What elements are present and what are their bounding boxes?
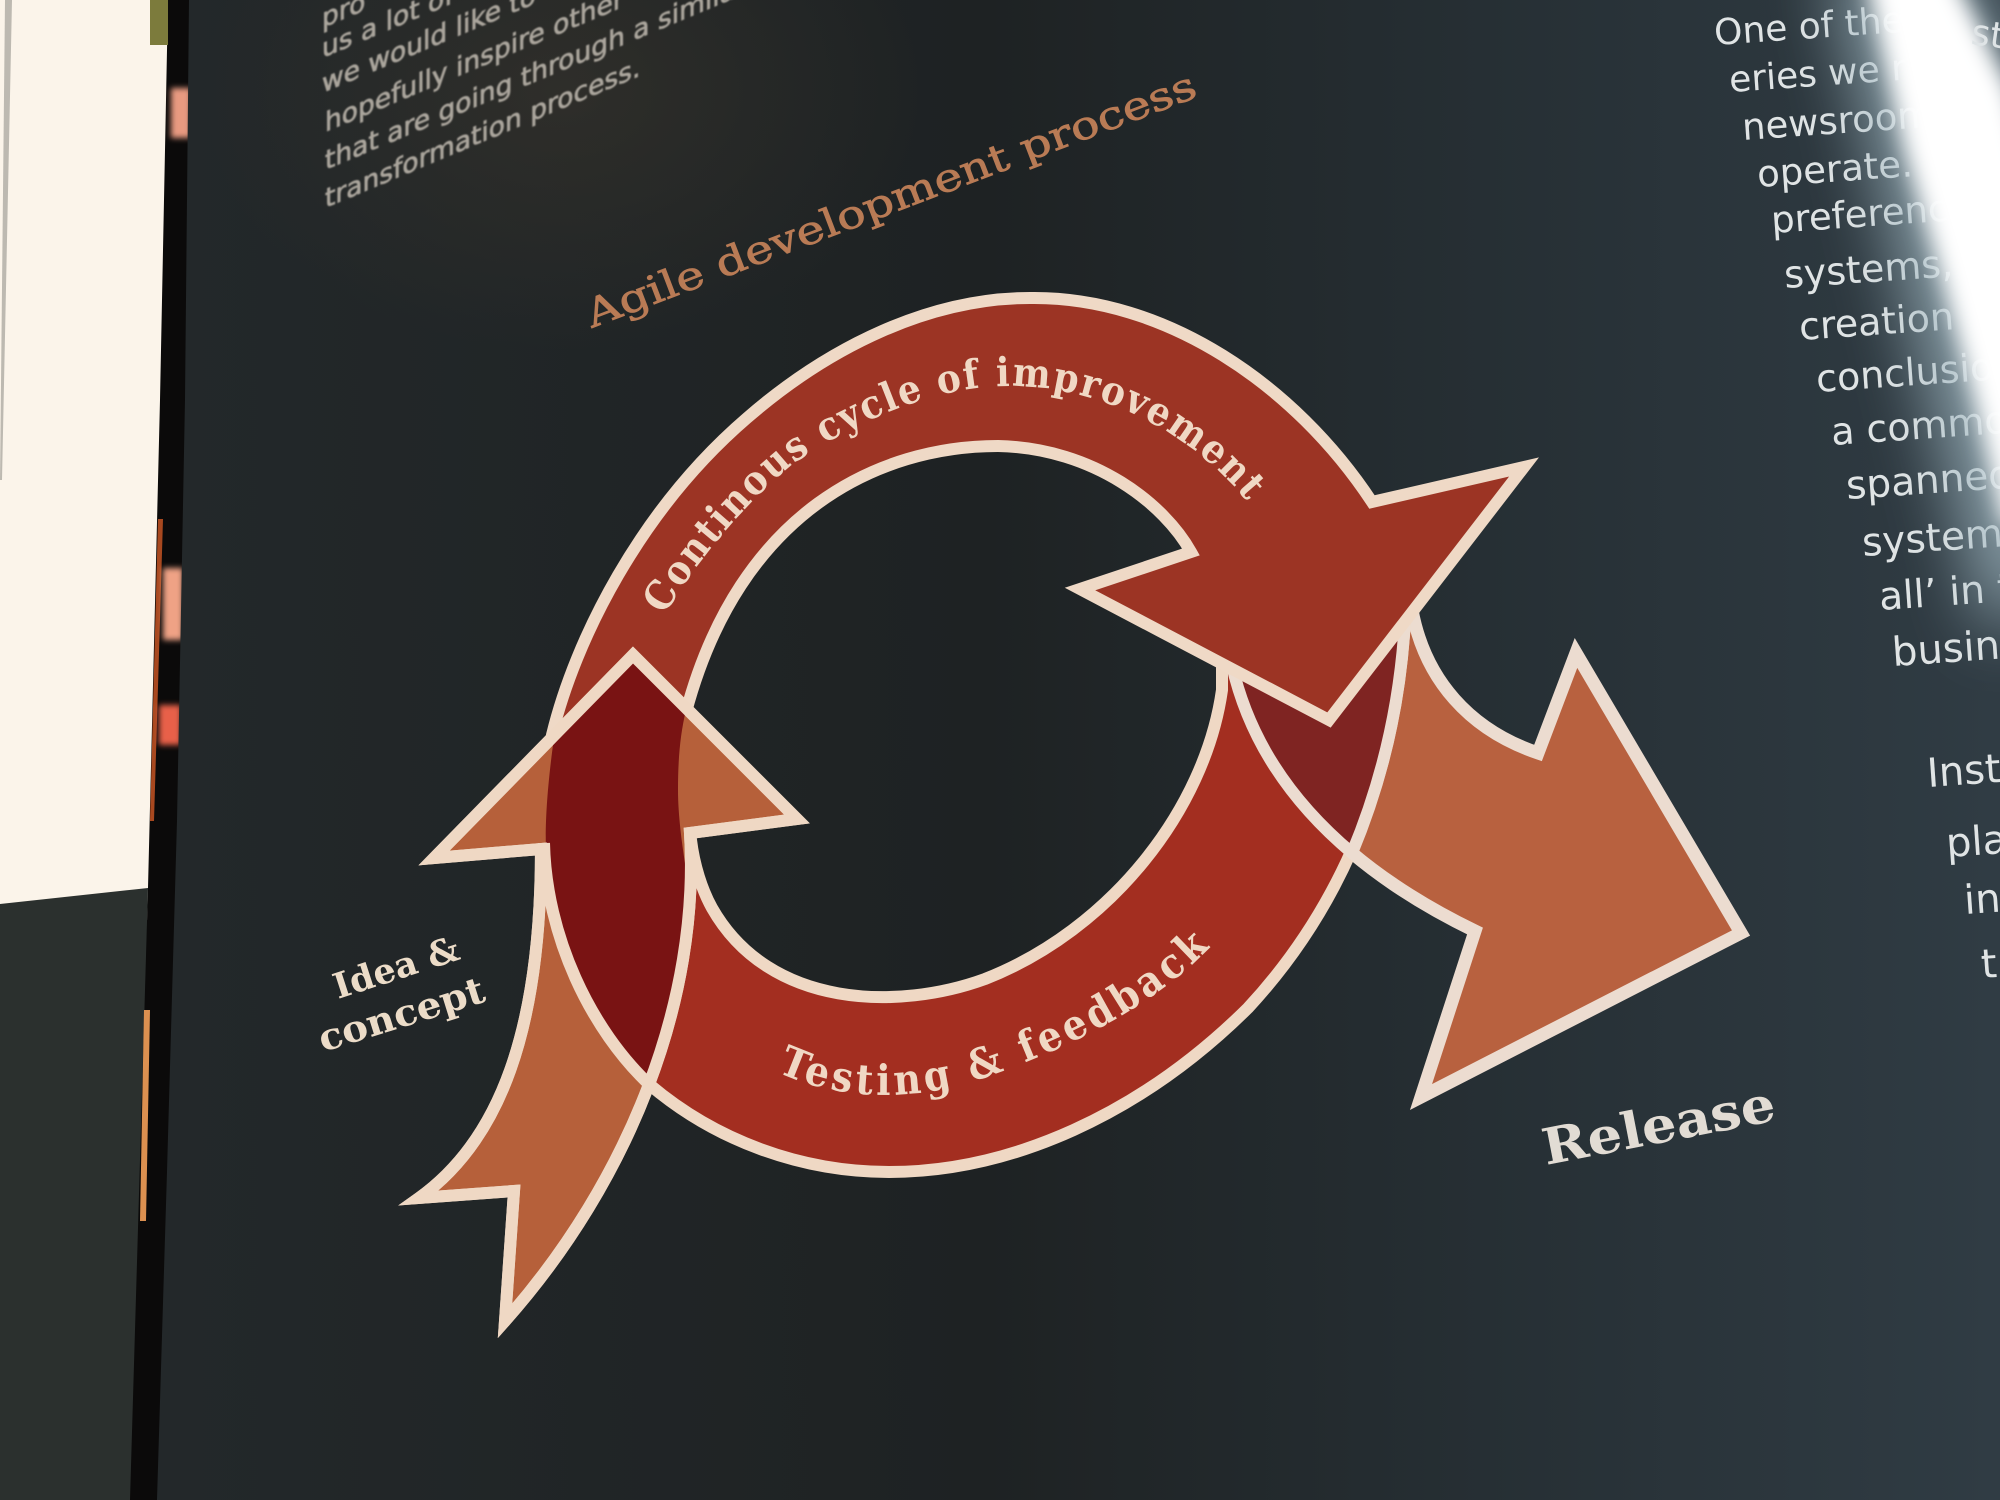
idea arrow outline over overlap [419,655,797,1321]
right column body text: newsroom [1741,93,1935,149]
label: testing and feedback: Testing & feedback [783,932,1210,1100]
right column body text: busin [1890,623,2000,676]
right column body text: t [1979,941,1998,988]
ribbon: testing and feedback [546,620,1405,1172]
right column body text: preference [1770,185,1972,242]
right column body text: Inst [1925,746,2000,797]
ribbon and arrowhead: continuous cycle [550,298,1524,760]
dark lower facing page [0,888,148,1500]
white facing page [0,0,200,920]
light glare on right page [1830,0,2000,640]
arrow: release [1232,610,1741,1097]
right column body text: systems, [1783,241,1954,297]
intro paragraph text: transformation process. [325,51,640,215]
arrow: idea and concept [419,655,797,1321]
right column body text: One of the [1713,0,1905,54]
overlap: release arrow and ribbon [1232,620,1405,853]
label: idea and concept: Idea & [328,928,464,1008]
black spine with photo slivers [130,0,192,1500]
label: idea and concept: concept [313,967,490,1061]
label: release: Release [1537,1074,1780,1177]
title: Agile development process: Agile development process [578,63,1203,338]
overlap: idea arrow and ribbon [546,660,689,1085]
right column body text [1713,0,2000,988]
label: idea and concept [313,928,490,1061]
right column body text: eries we r [1728,48,1908,101]
right column body text: operate. [1756,142,1914,196]
ring edge over idea arrow [544,843,652,1087]
right column body text: creation [1798,294,1955,349]
agile cycle diagram [419,298,1741,1321]
label: continuous cycle of improvement: Continous cycle of improvement [645,356,1264,609]
